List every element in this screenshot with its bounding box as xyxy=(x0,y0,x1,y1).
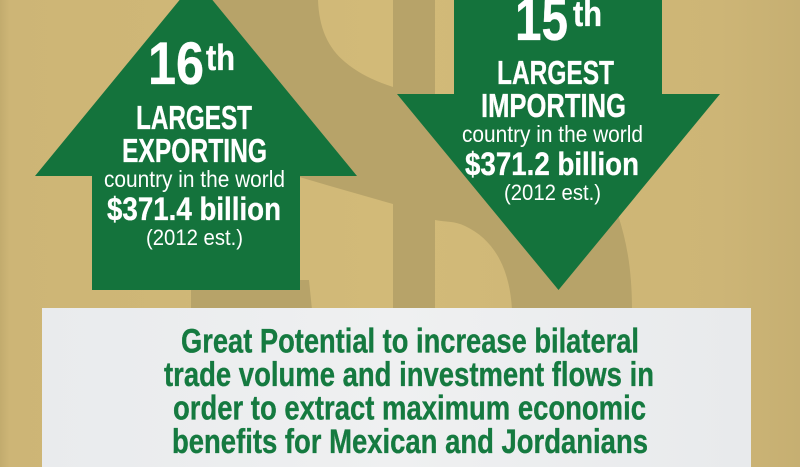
statement text: trade volume and investment flows in xyxy=(164,356,654,394)
note: export year: (2012 est.) xyxy=(146,225,243,250)
rank: 16th: th xyxy=(206,37,235,78)
statement text xyxy=(164,322,654,461)
dollar sign watermark xyxy=(191,0,632,310)
label: largest importing xyxy=(481,54,626,124)
rank: 16th: 16 xyxy=(148,30,204,97)
label: largest exporting xyxy=(122,99,267,169)
note: import year: (2012 est.) xyxy=(504,180,601,205)
text: country in the world: country in the world xyxy=(104,166,285,192)
label: largest importing: LARGEST xyxy=(497,54,614,91)
panel: great potential xyxy=(42,308,751,467)
arrow: imports xyxy=(397,0,720,290)
label: largest exporting: EXPORTING xyxy=(122,132,267,169)
arrow shape: up xyxy=(35,0,357,290)
value: export total: $371.4 billion xyxy=(107,191,281,227)
arrow: exports xyxy=(35,0,357,290)
panel background xyxy=(42,308,751,467)
statement text: Great Potential to increase bilateral xyxy=(181,322,639,360)
arrow shape: down xyxy=(397,0,720,290)
label: largest exporting: LARGEST xyxy=(136,99,252,136)
label: largest importing: IMPORTING xyxy=(481,87,626,124)
statement text: order to extract maximum economic xyxy=(173,390,646,428)
statement text: benefits for Mexican and Jordanians xyxy=(172,423,648,461)
text: country in the world: country in the world xyxy=(462,121,643,147)
value: import total: $371.2 billion xyxy=(465,146,639,182)
